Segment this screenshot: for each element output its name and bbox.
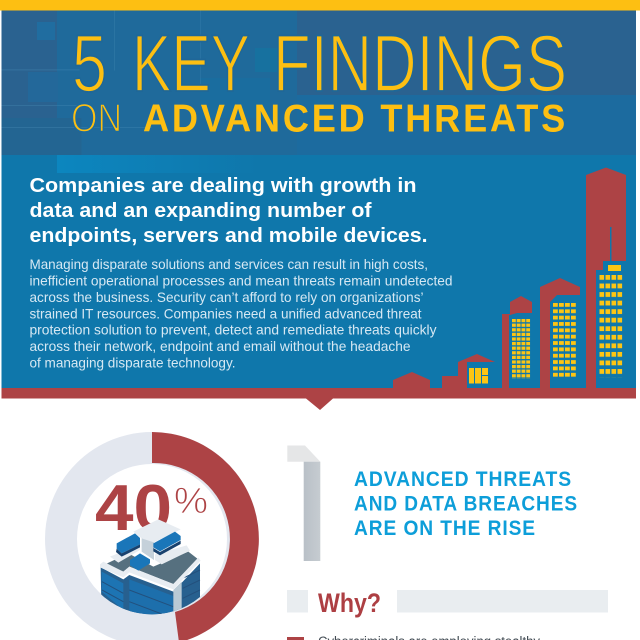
intro body text: Managing disparate solutions and services can result in high costs,: [30, 256, 428, 272]
intro body text: across the business. Security can’t afford to rely on organizations’: [30, 289, 424, 305]
intro body text: across their network, endpoint and email without the headache: [30, 338, 411, 354]
top yellow bar: [0, 0, 640, 10]
heading: finding 1: AND DATA BREACHES: [354, 492, 578, 516]
donut chart: 40%: [61, 432, 259, 640]
statistic: 40%: 40: [95, 471, 172, 544]
title: on advanced threats: ON: [71, 96, 122, 140]
heading: finding 1: [354, 468, 578, 540]
intro body text: inefficient operational processes and mean threats remain undetected: [30, 272, 452, 288]
statistic: 40%: [95, 471, 208, 544]
title: on advanced threats: ADVANCED THREATS: [143, 98, 568, 140]
title: 5 key findings: KEY: [132, 19, 250, 109]
red divider bar with arrow: [2, 388, 636, 410]
intro body text: strained IT resources. Companies need a unified advanced threat: [30, 306, 422, 322]
intro heading: endpoints, servers and mobile devices.: [30, 224, 428, 247]
second tower: [540, 278, 580, 388]
heading: finding 1: ARE ON THE RISE: [354, 517, 536, 540]
header panel: [2, 10, 636, 156]
tall tower: [586, 168, 626, 388]
house with window: [442, 354, 495, 388]
heading: finding 1: ADVANCED THREATS: [354, 468, 572, 491]
why band: Why?: [318, 588, 381, 618]
intro heading: [30, 174, 428, 247]
intro body text: of managing disparate technology.: [30, 354, 236, 370]
illustration: city skyline: [393, 168, 626, 388]
statistic: 40%: %: [174, 480, 208, 521]
title: 5 key findings: [72, 19, 567, 109]
intro body text: [30, 256, 452, 370]
icon: office building: [100, 519, 201, 623]
numeral 1: [287, 446, 320, 561]
third tower: [502, 296, 532, 388]
intro heading: data and an expanding number of: [30, 199, 372, 222]
panel: intro: [2, 155, 636, 389]
small house: [393, 372, 430, 388]
intro body text: protection solution to prevent, detect and remediate threats quickly: [30, 322, 436, 338]
title: 5 key findings: 5: [72, 19, 107, 109]
why band: [287, 588, 608, 618]
intro heading: Companies are dealing with growth in: [30, 174, 416, 197]
